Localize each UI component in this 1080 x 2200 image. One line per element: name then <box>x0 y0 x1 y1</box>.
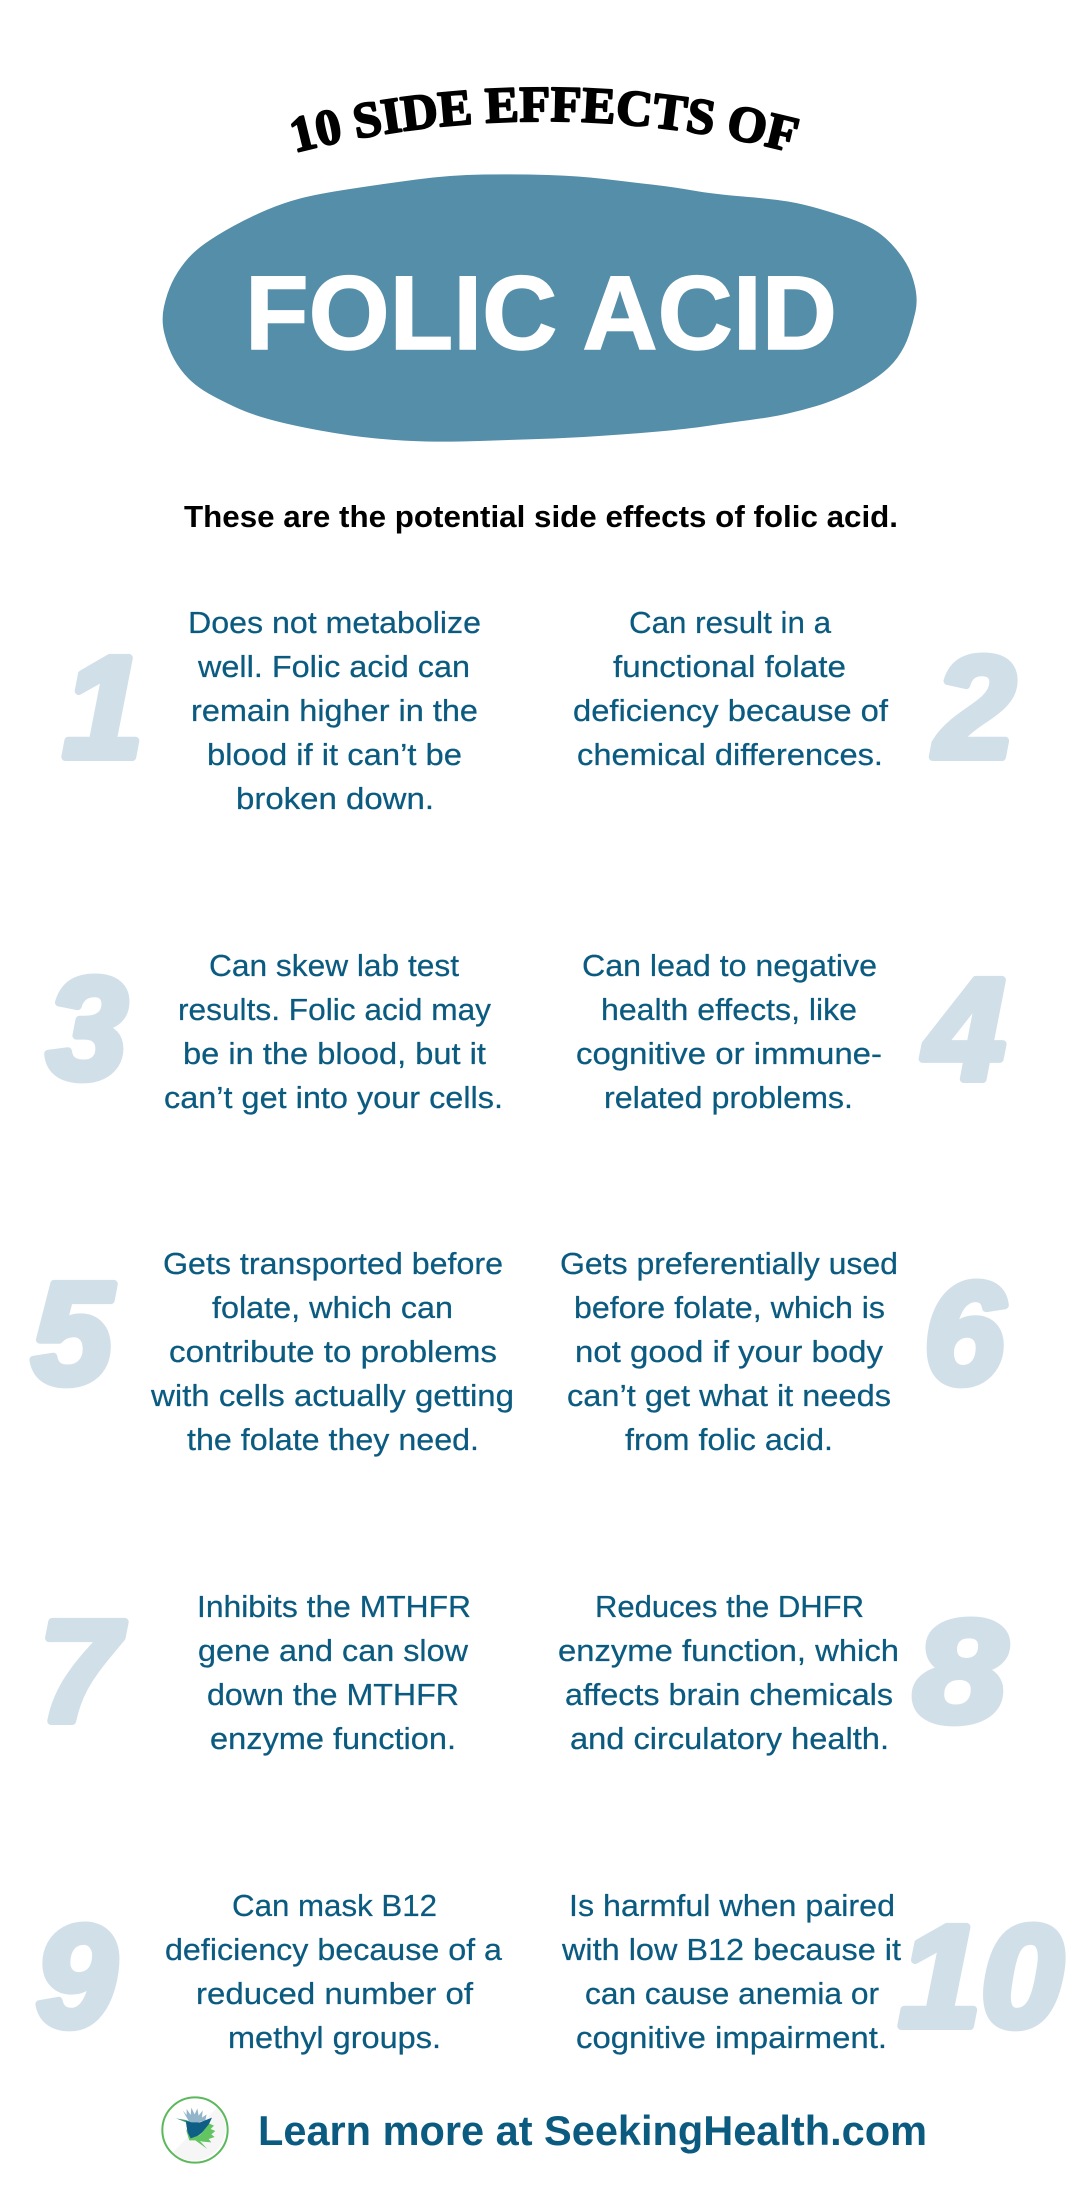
title banner: folic acid blob <box>163 174 917 442</box>
text: effect 8 <box>558 1589 899 1756</box>
title: 10 side effects of: 10 SIDE EFFECTS OF <box>291 86 800 152</box>
text: effect 4: cognitive or immune- <box>576 1036 882 1071</box>
text: effect 4: related problems. <box>604 1080 853 1115</box>
text: effect 4: Can lead to negative <box>582 948 877 983</box>
text: effect 10 <box>561 1888 901 2055</box>
text: effect 1: Does not metabolize <box>188 605 481 640</box>
text: effect 5: the folate they need. <box>187 1422 479 1457</box>
number 2: 2 <box>932 627 1015 788</box>
text: effect 2 <box>573 605 888 772</box>
text: effect 9: deficiency because of a <box>165 1932 503 1967</box>
text: effect 6: before folate, which is <box>574 1290 885 1325</box>
text: effect 7 <box>197 1589 471 1756</box>
text: effect 3 <box>164 948 503 1115</box>
icon: hummingbird logo <box>162 2097 228 2163</box>
text: effect 7: gene and can slow <box>198 1633 469 1668</box>
text: effect 6 <box>560 1246 898 1457</box>
text: effect 2: deficiency because of <box>573 693 888 728</box>
number 4: 4 <box>922 949 1005 1110</box>
text: effect 1: well. Folic acid can <box>197 649 470 684</box>
text: effect 1: remain higher in the <box>191 693 478 728</box>
text: effect 3: can’t get into your cells. <box>164 1080 503 1115</box>
text: effect 2: chemical differences. <box>577 737 883 772</box>
text: effect 6: Gets preferentially used <box>560 1246 898 1281</box>
text: effect 3: Can skew lab test <box>209 948 459 983</box>
title banner: folic acid blob: FOLIC ACID <box>245 255 837 372</box>
text: effect 10: Is harmful when paired <box>569 1888 895 1923</box>
text: effect 2: Can result in a <box>629 605 832 640</box>
text: effect 1: blood if it can’t be <box>207 737 462 772</box>
text: effect 3: results. Folic acid may <box>178 992 492 1027</box>
text: effect 4: health effects, like <box>601 992 857 1027</box>
subtitle: These are the potential side effects of folic acid. <box>184 499 898 534</box>
number 1: 1 <box>63 627 143 788</box>
text: effect 9: Can mask B12 <box>232 1888 437 1923</box>
text: effect 2: functional folate <box>613 649 846 684</box>
text: effect 3: be in the blood, but it <box>183 1036 486 1071</box>
text: effect 8: enzyme function, which <box>558 1633 899 1668</box>
text: effect 8: affects brain chemicals <box>565 1677 893 1712</box>
text: effect 10: with low B12 because it <box>561 1932 901 1967</box>
call to action: Learn more at SeekingHealth.com <box>258 2107 927 2154</box>
number 7: 7 <box>39 1591 125 1752</box>
text: effect 8: and circulatory health. <box>570 1721 889 1756</box>
text: effect 10: can cause anemia or <box>585 1976 879 2011</box>
number 9: 9 <box>36 1896 116 2057</box>
number 10: 10 <box>899 1896 1063 2057</box>
number 5: 5 <box>32 1253 114 1414</box>
number 3: 3 <box>47 948 127 1109</box>
text: effect 7: Inhibits the MTHFR <box>197 1589 471 1624</box>
text: effect 5: Gets transported before <box>163 1246 503 1281</box>
text: effect 9: methyl groups. <box>228 2020 441 2055</box>
text: effect 9: reduced number of <box>196 1976 473 2011</box>
text: effect 6: can’t get what it needs <box>567 1378 891 1413</box>
text: effect 5: folate, which can <box>212 1290 453 1325</box>
text: effect 5: contribute to problems <box>169 1334 497 1369</box>
text: effect 8: Reduces the DHFR <box>595 1589 864 1624</box>
text: effect 7: enzyme function. <box>210 1721 456 1756</box>
text: effect 6: from folic acid. <box>625 1422 833 1457</box>
text: effect 1: broken down. <box>236 781 434 816</box>
text: effect 1 <box>188 605 481 816</box>
number 6: 6 <box>924 1253 1005 1414</box>
text: effect 5: with cells actually getting <box>150 1378 514 1413</box>
text: effect 9 <box>165 1888 503 2055</box>
text: effect 5 <box>150 1246 514 1457</box>
text: effect 4 <box>576 948 882 1115</box>
text: effect 10: cognitive impairment. <box>576 2020 887 2055</box>
text: effect 7: down the MTHFR <box>207 1677 459 1712</box>
number 8: 8 <box>914 1591 1006 1752</box>
text: effect 6: not good if your body <box>575 1334 884 1369</box>
